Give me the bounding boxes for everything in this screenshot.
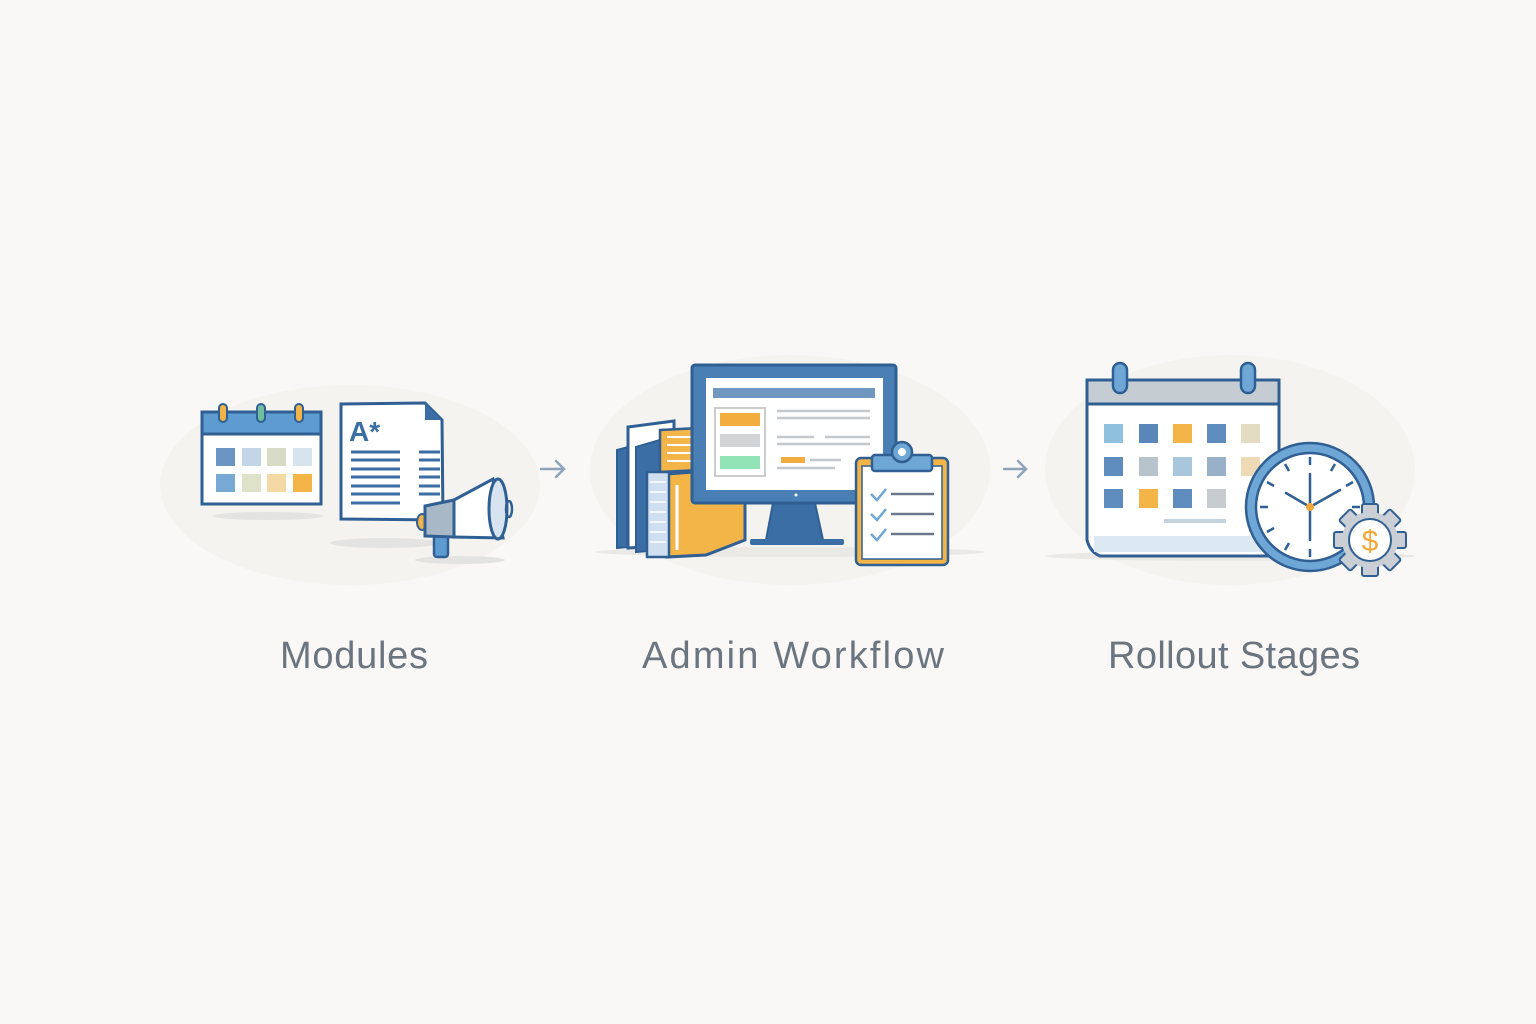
icon: binders & folders: [617, 421, 745, 557]
icon: gear with dollar: [1334, 504, 1406, 576]
icon: large calendar: [1087, 363, 1279, 556]
icon: clipboard: [856, 442, 948, 565]
arrow 1: [541, 461, 564, 477]
arrow 2: [1004, 461, 1026, 477]
icon: megaphone: [415, 479, 512, 564]
label: rollout stages: Rollout Stages: [1108, 635, 1360, 677]
panel: admin workflow: [590, 355, 990, 585]
icon: gear with dollar: $: [1362, 525, 1379, 558]
backdrop blob: modules: [160, 385, 540, 585]
backdrop blob: admin: [590, 355, 990, 585]
panel: modules: [160, 385, 540, 585]
icon: clock: [1246, 443, 1374, 571]
label: modules: Modules: [280, 635, 428, 677]
icon: calendar: [202, 404, 323, 520]
icon: document A*: A*: [349, 416, 380, 447]
backdrop blob: rollout: [1045, 355, 1415, 585]
panel: rollout stages: [1045, 355, 1415, 585]
label: admin workflow: Admin Workflow: [642, 635, 945, 677]
icon: document A*: [330, 403, 443, 548]
icon: monitor: [692, 365, 896, 545]
